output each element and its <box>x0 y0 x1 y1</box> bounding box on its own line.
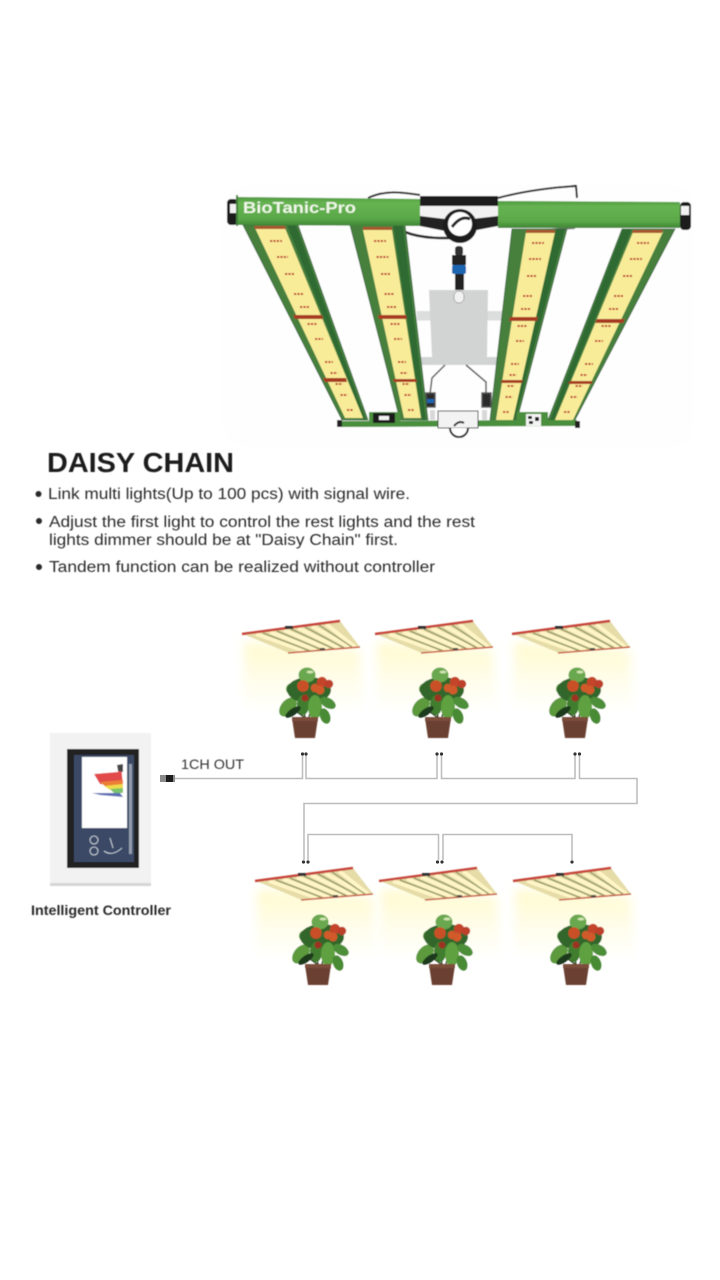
connector arrowheads <box>301 752 581 864</box>
arm 1 <box>243 225 368 420</box>
signal wiring between lights <box>175 752 637 864</box>
light and plant 4 <box>255 868 377 985</box>
arm 4 <box>548 229 675 420</box>
intelligent controller device <box>50 733 151 886</box>
bullet 2: Adjust the first light to control the rest lights and the rest <box>49 514 476 531</box>
title: DAISY CHAIN <box>47 447 234 478</box>
lower connector cables <box>426 365 491 420</box>
bullet 2 <box>36 514 476 549</box>
controller label: Intelligent Controller <box>31 902 172 918</box>
bottom rail <box>337 411 580 437</box>
bullet 3: Tandem function can be realized without controller <box>49 559 435 576</box>
driver box <box>417 290 502 365</box>
product photo: BioTanic-Pro LED grow light <box>222 185 694 447</box>
panel backdrop <box>222 185 694 447</box>
power cable with blue connector <box>452 246 466 292</box>
light and plant 5 <box>379 868 501 985</box>
hanging cables <box>368 186 577 238</box>
top row of grow lights and plants <box>242 621 634 738</box>
brand label: BioTanic-Pro <box>243 200 356 217</box>
center rail and bracket <box>420 196 498 243</box>
bullet 1: Link multi lights(Up to 100 pcs) with signal wire. <box>48 486 410 503</box>
bullet list <box>36 486 476 576</box>
top bar left <box>227 195 420 226</box>
top bar right <box>498 201 691 230</box>
light and plant 3 <box>512 621 634 738</box>
controller screen spectrum chart <box>82 757 127 828</box>
arm 2 <box>350 225 428 420</box>
bullet 2: lights dimmer should be at "Daisy Chain" first. <box>49 532 398 549</box>
light and plant 1 <box>242 621 364 738</box>
bottom row of grow lights and plants <box>255 868 635 985</box>
light and plant 6 <box>513 868 635 985</box>
controller dial icons <box>90 836 122 855</box>
light and plant 2 <box>375 621 497 738</box>
output connector plug <box>160 775 175 782</box>
output label: 1CH OUT <box>181 756 244 772</box>
arm 3 <box>490 229 567 420</box>
